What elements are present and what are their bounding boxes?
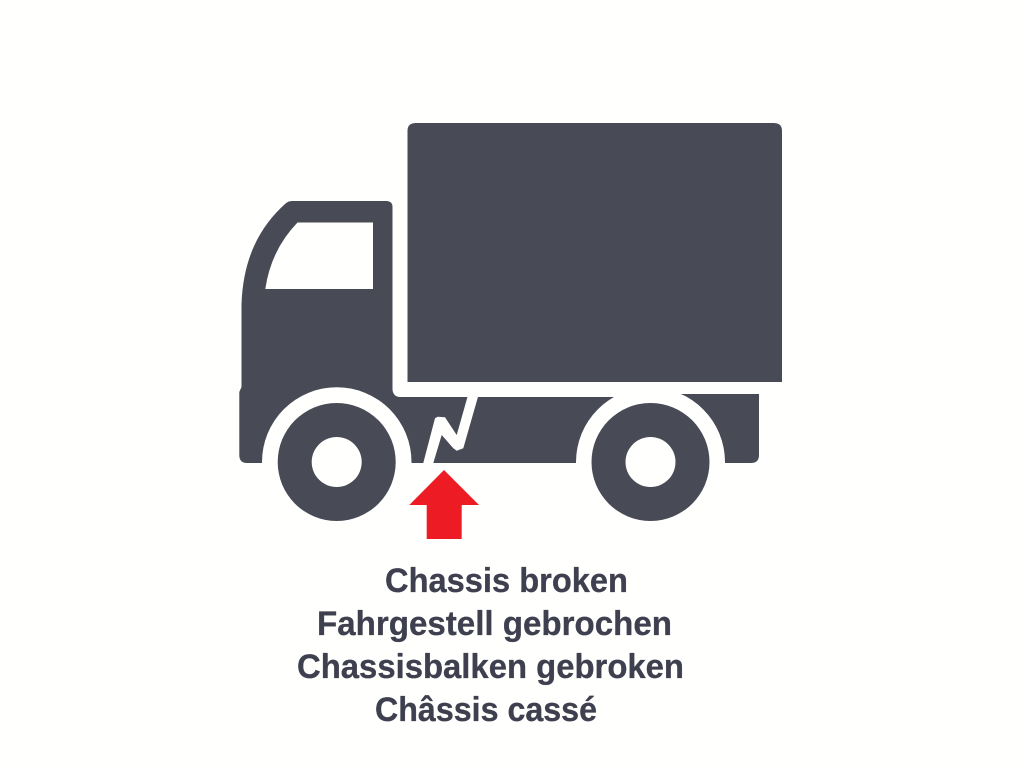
truck cargo box: [408, 123, 782, 382]
label text block: [297, 562, 684, 729]
rear wheel: [592, 403, 710, 521]
front wheel: [278, 403, 396, 521]
chassis crack: [423, 394, 479, 464]
label: English: Chassis broken: [385, 562, 628, 600]
label: German: Fahrgestell gebrochen: [317, 605, 672, 643]
icon: red arrow pointing to the crack: [409, 470, 479, 539]
truck cab and chassis: [239, 201, 759, 463]
label: Dutch: Chassisbalken gebroken: [297, 648, 684, 686]
label: French: Châssis cassé: [375, 691, 597, 729]
cab window: [265, 222, 373, 289]
gap between box and chassis: [392, 382, 790, 397]
front wheel arch: [262, 387, 412, 464]
rear wheel arch: [576, 388, 725, 464]
icon: truck: [239, 123, 790, 521]
